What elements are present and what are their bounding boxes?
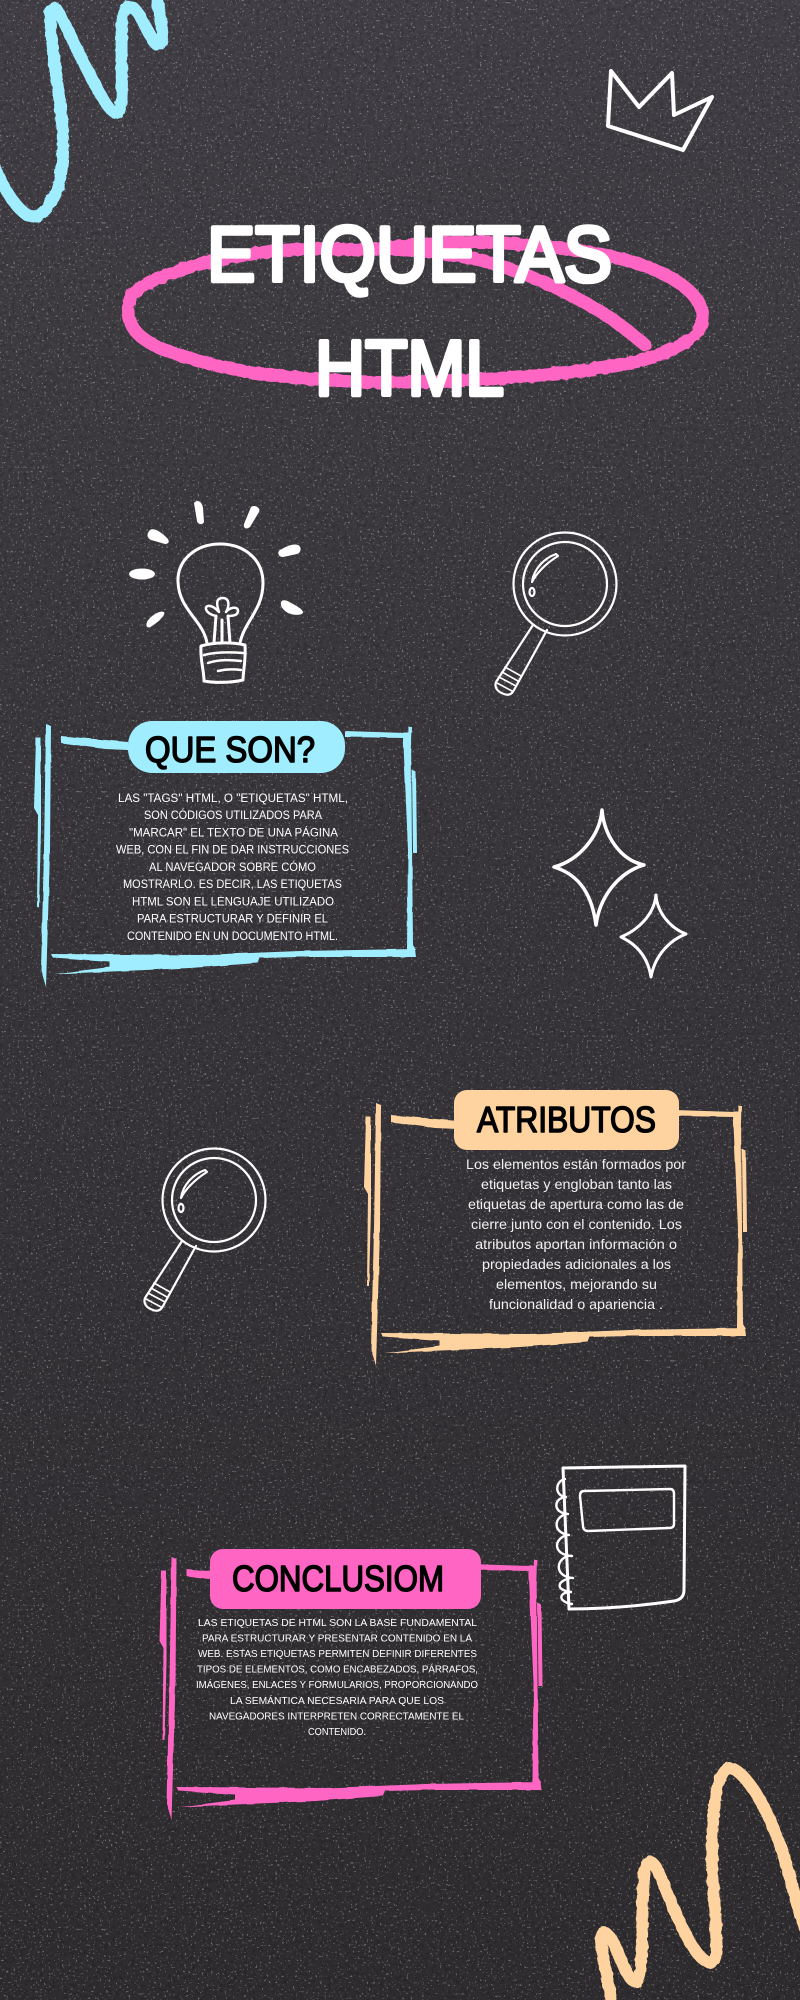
heading pill — [210, 1549, 481, 1609]
title line 2: HTML — [315, 324, 504, 412]
body text: LA SEMÁNTICA NECESARIA PARA QUE LOS — [230, 1694, 444, 1707]
body text: "MARCAR" EL TEXTO DE UNA PÁGINA — [129, 826, 338, 840]
body text: HTML SON EL LENGUAJE UTILIZADO — [132, 896, 334, 908]
body text: cierre junto con el contenido. Los — [471, 1216, 682, 1232]
body text: etiquetas de apertura como las de — [468, 1196, 684, 1212]
icon: crown — [608, 71, 712, 150]
panel: que son — [34, 721, 417, 987]
body text: AL NAVEGADOR SOBRE CÓMO — [149, 861, 316, 874]
body text: LAS "TAGS" HTML, O "ETIQUETAS" HTML, — [118, 793, 348, 805]
body text: atributos aportan información o — [475, 1236, 677, 1252]
icon: magnifying glass — [495, 532, 616, 695]
body text: MOSTRARLO. ES DECIR, LAS ETIQUETAS — [123, 879, 342, 891]
body text: CONTENIDO. — [308, 1726, 366, 1738]
body text: WEB, CON EL FIN DE DAR INSTRUCCIONES — [116, 845, 349, 857]
body text: etiquetas y engloban tanto las — [481, 1176, 672, 1192]
body text: elementos, mejorando su — [496, 1276, 657, 1292]
icon: light bulb — [129, 501, 303, 682]
body text: Los elementos están formados por — [466, 1156, 686, 1172]
icon: magnifying glass left — [144, 1148, 266, 1311]
blue hand-drawn frame — [34, 724, 417, 987]
heading: CONCLUSIOM — [232, 1558, 444, 1599]
body text — [466, 1156, 686, 1312]
panel: conclusion — [160, 1549, 542, 1820]
heading pill — [128, 721, 345, 773]
body text — [196, 1617, 478, 1738]
body text: PARA ESTRUCTURAR Y PRESENTAR CONTENIDO EN LA — [202, 1632, 472, 1644]
body text: TIPOS DE ELEMENTOS, COMO ENCABEZADOS, PÁRRAFOS, — [197, 1663, 478, 1676]
heading: ATRIBUTOS — [477, 1099, 656, 1140]
body text: NAVEGADORES INTERPRETEN CORRECTAMENTE EL — [209, 1710, 464, 1722]
body text: propiedades adicionales a los — [482, 1256, 671, 1272]
panel: atributos — [364, 1090, 747, 1366]
pink hand-drawn frame — [160, 1557, 542, 1820]
icon: large sparkle — [554, 810, 644, 925]
body text: WEB. ESTAS ETIQUETAS PERMITEN DEFINIR DIFERENTES — [198, 1648, 477, 1660]
icon: small sparkle — [621, 895, 686, 977]
icon: spiral notebook — [556, 1466, 685, 1609]
title line 1: ETIQUETAS — [207, 210, 612, 298]
body text — [116, 793, 349, 943]
body text: funcionalidad o apariencia . — [489, 1296, 663, 1312]
body text: LAS ETIQUETAS DE HTML SON LA BASE FUNDAMENTAL — [198, 1617, 477, 1629]
body text: PARA ESTRUCTURAR Y DEFINIR EL — [137, 914, 329, 926]
heading: QUE SON? — [145, 729, 315, 770]
heading pill — [454, 1090, 679, 1150]
body text: CONTENIDO EN UN DOCUMENTO HTML. — [127, 931, 338, 943]
peach hand-drawn frame — [364, 1103, 747, 1366]
icon: blue scribble top left — [0, 0, 162, 217]
body text: SON CÓDIGOS UTILIZADOS PARA — [144, 809, 322, 822]
icon: peach scribble bottom right — [601, 1768, 800, 2000]
pink oval scribble — [128, 242, 703, 382]
title with pink circled scribble — [128, 210, 703, 412]
body text: IMÁGENES, ENLACES Y FORMULARIOS, PROPORCIONANDO — [196, 1678, 478, 1691]
